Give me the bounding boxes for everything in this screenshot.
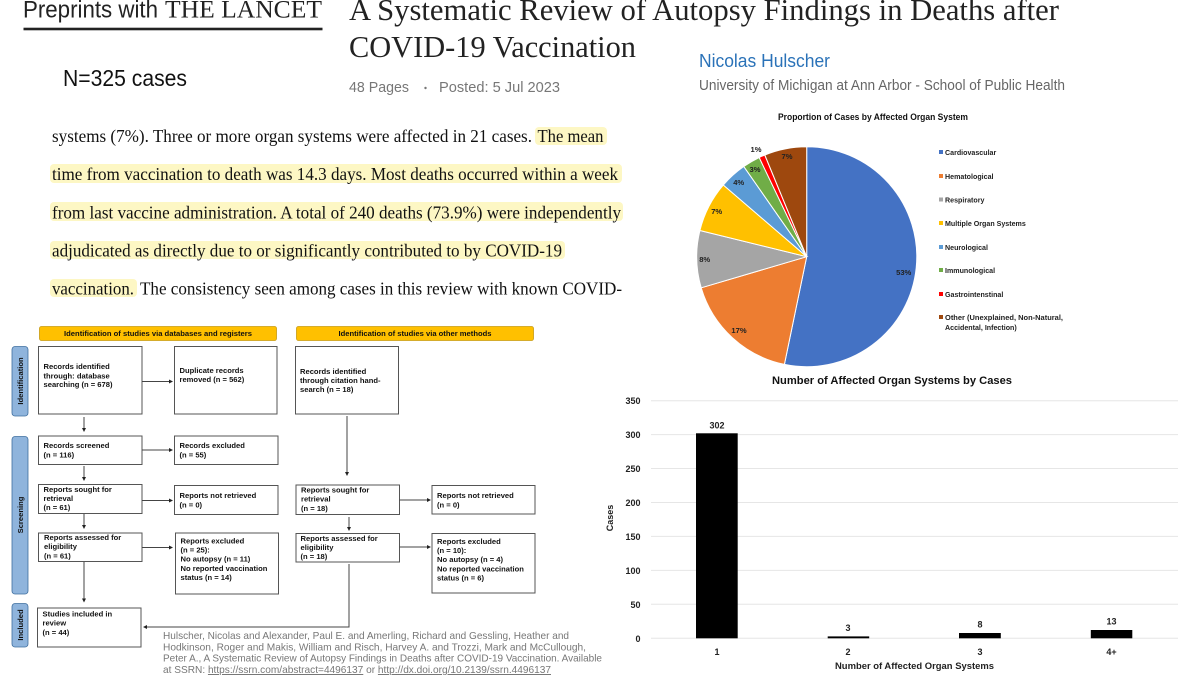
box: other reports sought: retrieval xyxy=(301,494,331,504)
bar: 3 organ systems, 8: 3 xyxy=(977,647,983,657)
PRISMA flow diagram xyxy=(12,326,535,647)
y axis grid and labels: 50 xyxy=(630,600,640,610)
pie legend: Neurological xyxy=(945,244,988,252)
bar chart title: Number of Affected Organ Systems by Cases xyxy=(772,375,1012,387)
y axis grid and labels: 150 xyxy=(625,532,640,542)
pie legend: Multiple Organ Systems xyxy=(945,220,1026,228)
box: other reports not retrieved: (n = 0) xyxy=(437,500,460,510)
pie percentage labels: 7% xyxy=(711,207,722,216)
box: records identified: searching (n = 678) xyxy=(44,380,113,389)
bar chart: number of affected organ systems by cases xyxy=(605,375,1178,671)
bar: 1 organ system, 302: 302 xyxy=(709,421,725,431)
box: other reports not retrieved xyxy=(432,486,535,514)
box: reports not retrieved xyxy=(174,486,278,514)
pie legend: Other (Unexplained, Non-Natural, xyxy=(945,314,1063,322)
citation: Hulscher, Nicolas and Alexander, Paul E. and Amerling, Richard and Gessling, Heather and xyxy=(163,631,569,642)
box: citation hand-search: search (n = 18) xyxy=(300,385,354,394)
box: reports sought: Reports sought for xyxy=(44,485,112,494)
box: other reports sought: (n = 18) xyxy=(301,504,328,513)
pie chart: proportion of cases by affected organ system xyxy=(697,112,1063,367)
pie legend: Gastrointenstinal xyxy=(945,291,1003,299)
pie percentage labels: 7% xyxy=(782,152,793,161)
box: other reports sought: Reports sought for xyxy=(301,486,369,494)
pie legend: Accidental, Infection) xyxy=(945,324,1017,332)
stage: screening xyxy=(12,436,28,594)
box: reports sought: (n = 61) xyxy=(44,503,71,512)
stage: included xyxy=(12,604,28,647)
pie legend: Hematological xyxy=(945,173,994,181)
box: records excluded xyxy=(174,436,278,464)
box: other reports not retrieved: Reports not retrieved xyxy=(437,491,514,500)
abstract excerpt with highlights: vaccination. xyxy=(52,278,134,298)
box: reports assessed: eligibility xyxy=(44,542,78,551)
bar: 2 organ systems, 3: 2 xyxy=(845,647,851,657)
y axis grid and labels: 100 xyxy=(625,566,640,576)
x axis title: Number of Affected Organ Systems xyxy=(835,661,994,671)
box: other reports excluded xyxy=(432,534,535,593)
bar: 4+ organ systems, 13: 13 xyxy=(1106,617,1117,627)
y axis grid and labels: 0 xyxy=(635,634,640,644)
y axis grid and labels: 300 xyxy=(625,430,640,440)
author and affiliation: Nicolas Hulscher xyxy=(699,51,830,71)
pie percentage labels: 53% xyxy=(896,268,912,277)
abstract excerpt with highlights: The mean xyxy=(538,126,604,146)
box: reports assessed: (n = 61) xyxy=(44,552,71,560)
box: other reports excluded: (n = 10): xyxy=(437,546,466,555)
box: other reports excluded: No autopsy (n = 4) xyxy=(437,555,504,564)
box: citation hand-search xyxy=(296,346,398,414)
y axis grid and labels: 200 xyxy=(625,498,640,508)
pie percentage labels: 4% xyxy=(733,178,744,187)
pie title: Proportion of Cases by Affected Organ System xyxy=(778,112,968,122)
bar: 2 organ systems, 3 xyxy=(828,623,869,657)
flow arrows xyxy=(82,380,431,629)
box: duplicates removed: Duplicate records xyxy=(180,366,244,375)
pie legend: Immunological xyxy=(945,267,995,275)
box: other reports assessed xyxy=(296,534,400,562)
paper metadata: Posted: 5 Jul 2023 xyxy=(439,79,560,96)
y axis grid and labels xyxy=(625,396,1178,644)
citation xyxy=(163,631,602,675)
y axis grid and labels: 350 xyxy=(625,396,640,406)
box: reports excluded: (n = 25): xyxy=(180,546,210,554)
box: citation hand-search: through citation hand- xyxy=(300,376,381,385)
paper title: COVID-19 Vaccination xyxy=(349,29,636,64)
stage: screening: Screening xyxy=(16,496,25,533)
pie legend xyxy=(939,149,1063,332)
paper metadata: 48 Pages xyxy=(349,79,409,96)
y axis grid and labels: 250 xyxy=(625,464,640,474)
box: other reports excluded: status (n = 6) xyxy=(437,574,485,582)
box: reports excluded: Reports excluded xyxy=(180,536,245,546)
header: databases and registers: Identification of studies via databases and registers xyxy=(64,329,252,338)
box: records excluded: Records excluded xyxy=(180,441,245,450)
pie percentage labels: 17% xyxy=(731,326,747,335)
box: studies included xyxy=(38,608,141,647)
bar: 2 organ systems, 3: 3 xyxy=(845,623,851,633)
box: other reports excluded: Reports excluded xyxy=(437,537,501,546)
header: other methods xyxy=(296,326,534,340)
box: records excluded: (n = 55) xyxy=(180,450,207,460)
box: reports sought xyxy=(38,484,142,514)
pie slices xyxy=(697,147,917,367)
citation: Hodkinson, Roger and Makis, William and Risch, Harvey A. and Trozzi, Mark and McCullough, xyxy=(163,642,586,653)
box: reports assessed: Reports assessed for xyxy=(44,533,121,542)
bar: 4+ organ systems, 13: 4+ xyxy=(1106,647,1117,657)
box: studies included: Studies included in xyxy=(42,610,112,618)
box: citation hand-search: Records identified xyxy=(300,367,367,376)
box: records screened: Records screened xyxy=(44,441,110,450)
stage: identification: Identification xyxy=(16,357,25,405)
header: other methods: Identification of studies via other methods xyxy=(338,329,492,338)
author and affiliation: University of Michigan at Ann Arbor - School of Public Health xyxy=(699,78,1065,94)
bar: 1 organ system, 302: 1 xyxy=(714,647,720,657)
sample size label: N=325 cases xyxy=(63,65,187,91)
stage: identification xyxy=(12,346,28,416)
citation: Peter A., A Systematic Review of Autopsy Findings in Deaths after COVID-19 Vaccination. Available xyxy=(163,654,602,665)
box: studies included: (n = 44) xyxy=(42,628,70,637)
abstract excerpt with highlights: systems (7%). Three or more organ systems were affected in 21 cases. xyxy=(52,126,532,147)
pie legend: Respiratory xyxy=(945,196,984,204)
bar: 3 organ systems, 8 xyxy=(959,620,1001,657)
box: reports not retrieved: Reports not retrieved xyxy=(180,491,257,500)
pie percentage labels xyxy=(699,145,912,335)
box: other reports sought xyxy=(296,485,400,514)
box: reports assessed xyxy=(38,533,142,562)
box: studies included: review xyxy=(42,618,66,628)
box: other reports assessed: Reports assessed for xyxy=(300,534,378,543)
abstract excerpt with highlights xyxy=(50,126,623,298)
stage: included: Included xyxy=(16,609,25,641)
box: reports not retrieved: (n = 0) xyxy=(180,500,203,510)
box: records screened xyxy=(38,436,142,464)
abstract excerpt with highlights: from last vaccine administration. A total of 240 deaths (73.9%) were independently xyxy=(52,202,621,224)
box: records identified: through: database xyxy=(44,372,110,380)
logo: Preprints with The Lancet xyxy=(23,0,322,30)
box: duplicates removed: removed (n = 562) xyxy=(180,375,245,384)
abstract excerpt with highlights: adjudicated as directly due to or significantly contributed to by COVID-19 xyxy=(52,240,562,260)
pie percentage labels: 8% xyxy=(699,255,710,264)
box: other reports assessed: (n = 18) xyxy=(300,552,328,561)
box: reports excluded: No autopsy (n = 11) xyxy=(180,554,251,564)
box: other reports excluded: No reported vaccination xyxy=(437,564,524,574)
author and affiliation xyxy=(699,51,1065,94)
box: records identified: Records identified xyxy=(44,362,110,371)
box: reports excluded: No reported vaccination xyxy=(180,564,268,573)
box: reports sought: retrieval xyxy=(44,494,73,503)
box: reports excluded xyxy=(176,533,278,594)
header: databases and registers xyxy=(40,326,276,340)
abstract excerpt with highlights: time from vaccination to death was 14.3 days. Most deaths occurred within a week xyxy=(52,164,618,184)
y axis title: Cases xyxy=(605,505,615,531)
box: records identified xyxy=(38,346,142,414)
box: reports excluded: status (n = 14) xyxy=(180,573,232,582)
box: records screened: (n = 116) xyxy=(44,450,75,460)
pie percentage labels: 1% xyxy=(751,145,762,154)
bar: 4+ organ systems, 13 xyxy=(1091,617,1132,657)
box: other reports assessed: eligibility xyxy=(300,543,334,552)
bar: 3 organ systems, 8: 8 xyxy=(977,620,983,630)
paper title xyxy=(349,0,1060,64)
bar: 1 organ system, 302 xyxy=(696,421,738,657)
abstract excerpt with highlights: The consistency seen among cases in this review with known COVID- xyxy=(140,278,622,298)
box: duplicates removed xyxy=(174,346,277,414)
pie percentage labels: 3% xyxy=(750,165,761,174)
pie legend: Cardiovascular xyxy=(945,149,996,157)
paper metadata xyxy=(349,79,560,96)
